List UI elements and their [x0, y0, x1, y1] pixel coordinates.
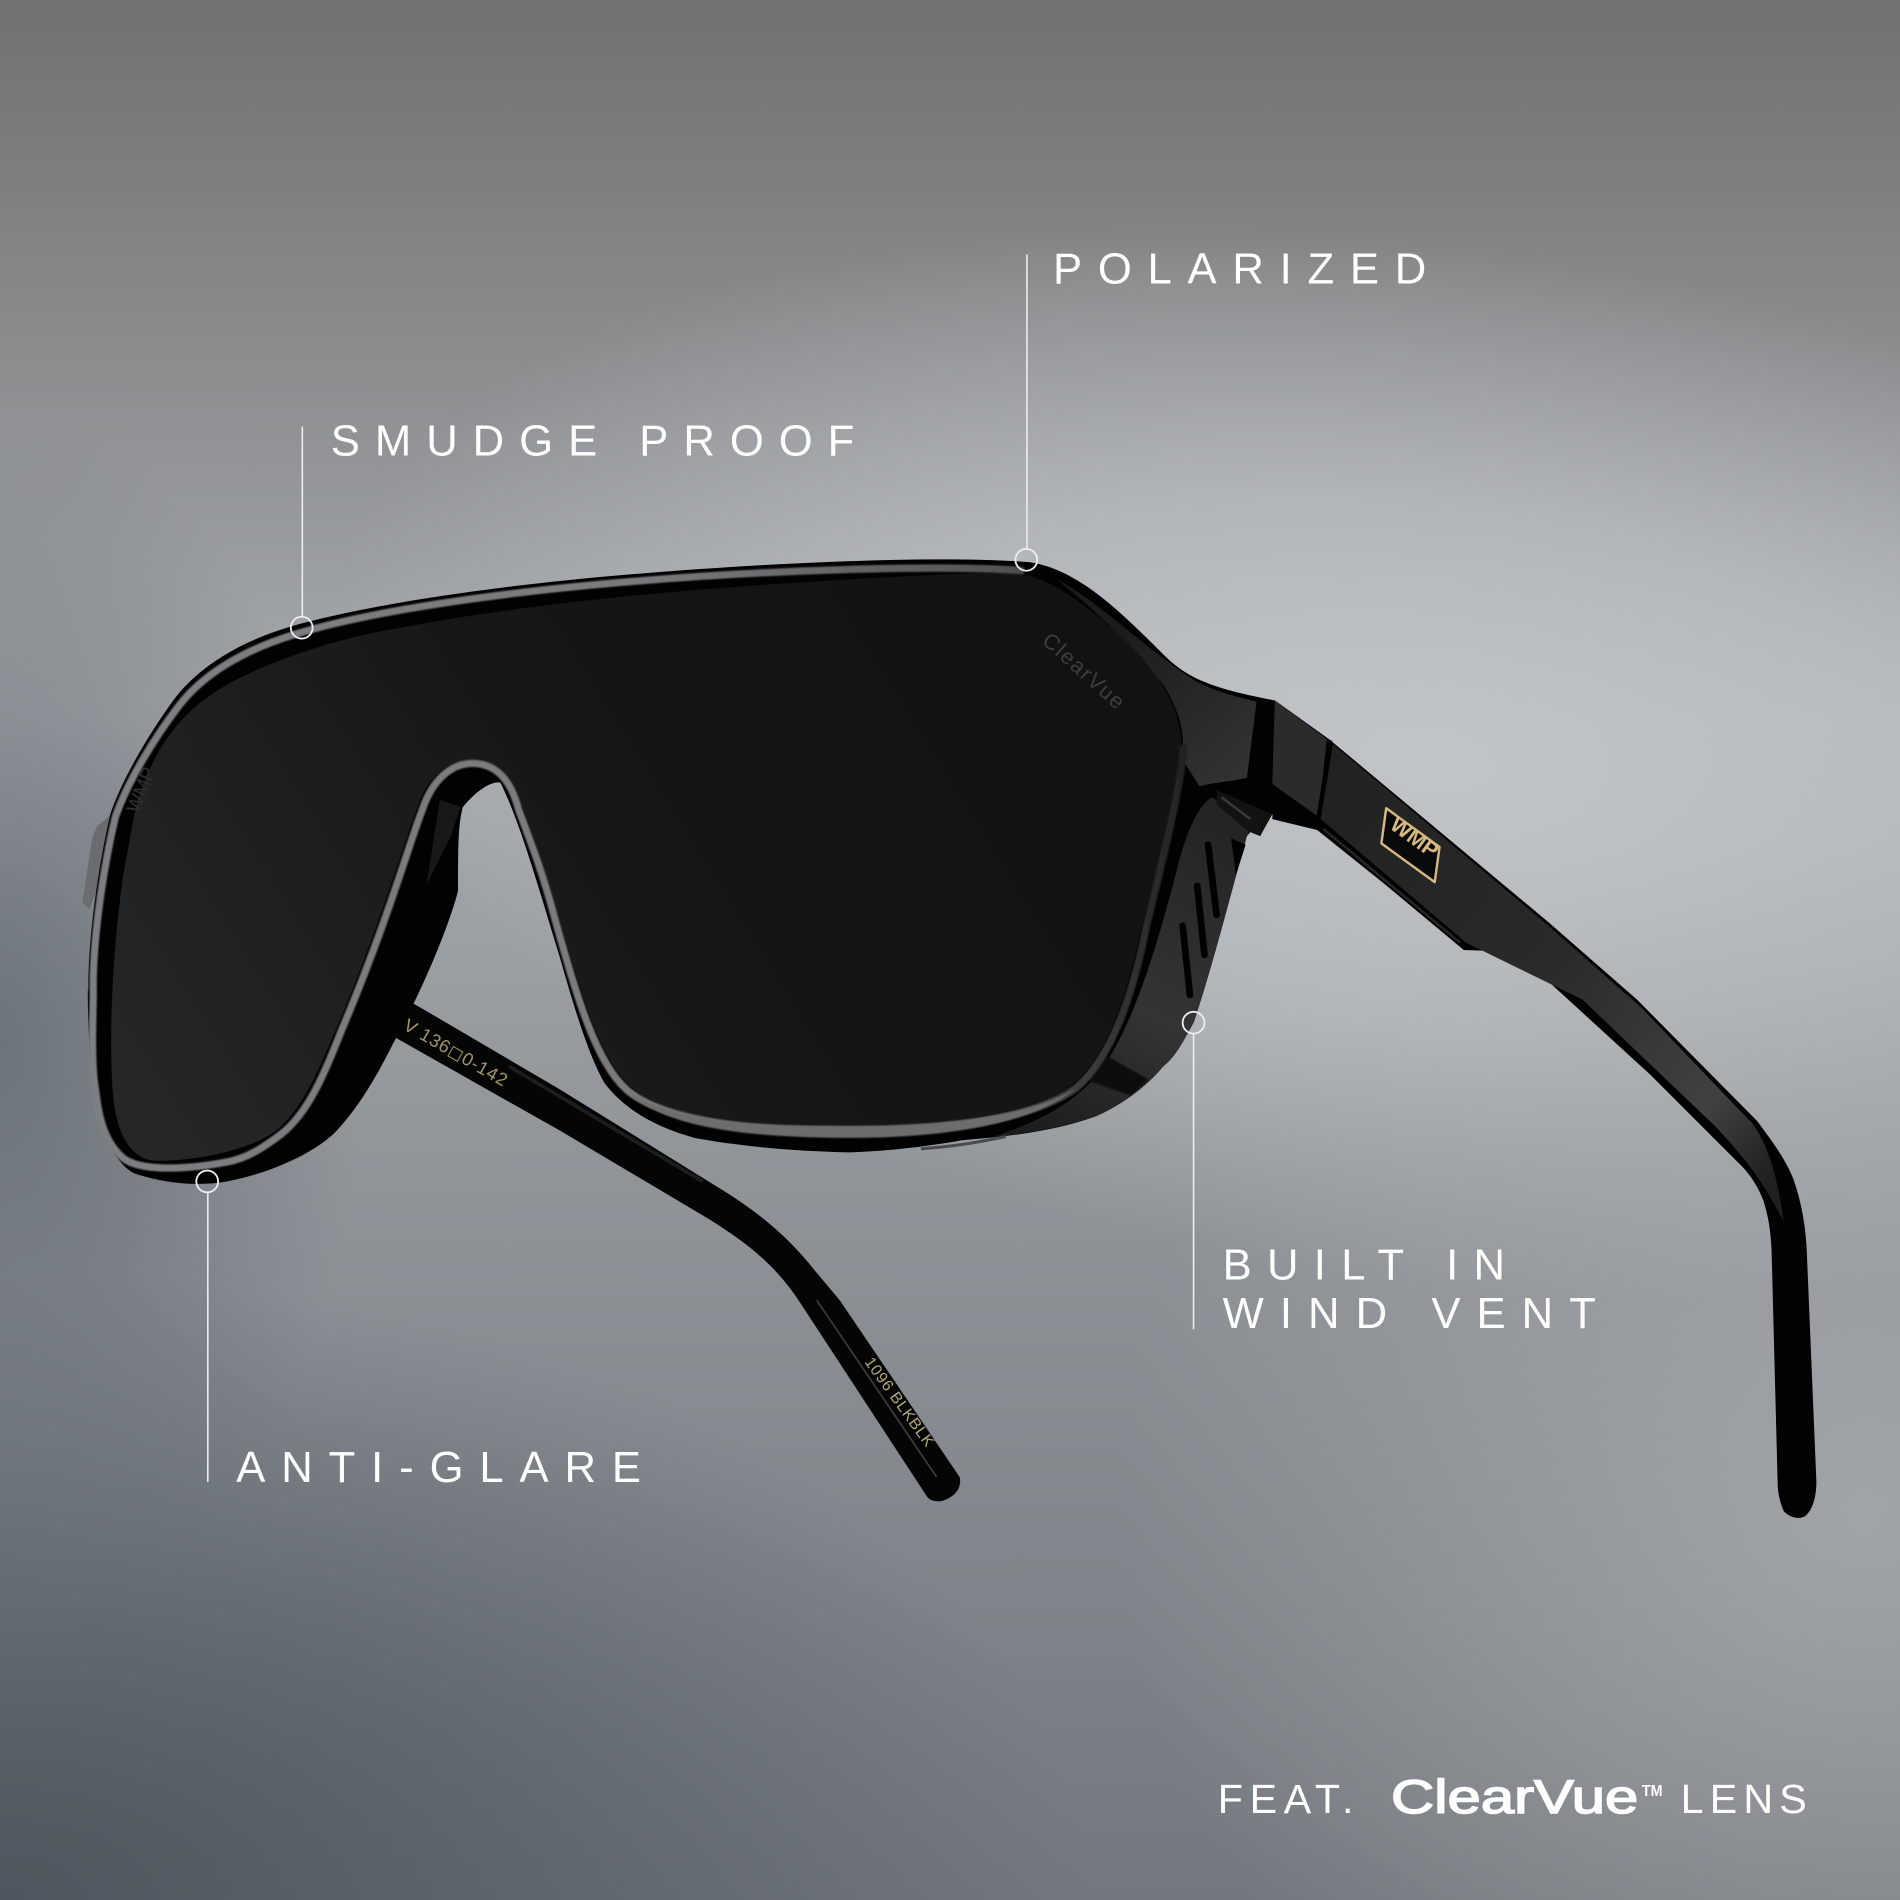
frame bevel rim: [93, 568, 1184, 1168]
nose pad gloss: [427, 800, 460, 885]
callout: built in wind vent: [1183, 1012, 1596, 1338]
callout: anti-glare: [196, 1171, 641, 1492]
callout: smudge proof: [291, 418, 854, 639]
callout: smudge proof: SMUDGE PROOF: [331, 418, 854, 466]
frame gloss near hinge: [1057, 579, 1257, 786]
temple face: [1321, 744, 1784, 1221]
callout: built in wind vent: WIND VENT: [1223, 1290, 1596, 1338]
temple text: size: V 136◻0-142: [400, 1015, 512, 1091]
far temple arm: [393, 1003, 960, 1501]
callout: polarized: [1015, 246, 1426, 571]
callout: anti-glare: ANTI-GLARE: [236, 1444, 641, 1492]
vent slots: [1183, 845, 1217, 995]
callout: polarized: POLARIZED: [1053, 246, 1426, 294]
faint left lens mark: WMP: [122, 764, 161, 816]
hinge block: [1272, 700, 1327, 817]
footer: feat. ClearVue lens: LENS: [1681, 1776, 1807, 1822]
temple text: model: 1096 BLKBLK: [861, 1354, 937, 1451]
frame body: [88, 559, 1330, 1184]
lens: [111, 573, 1181, 1161]
lens logo: ClearVue: ClearVue: [1038, 627, 1130, 714]
footer: feat. ClearVue lens: TM: [1642, 1783, 1663, 1800]
callout: built in wind vent: BUILT IN: [1223, 1242, 1505, 1290]
shield dark reflection: [1082, 1053, 1149, 1095]
hinge underside piece: [1217, 790, 1272, 836]
footer: feat. ClearVue lens: FEAT.: [1218, 1776, 1354, 1822]
bottom rim highlight: [628, 1088, 1076, 1138]
WMP badge: WMP: [1386, 811, 1444, 863]
side shield with wind vent: [921, 790, 1272, 1149]
footer: feat. ClearVue lens: [1218, 1771, 1807, 1824]
footer: feat. ClearVue lens: ClearVue: [1391, 1771, 1638, 1824]
near temple arm: [1272, 700, 1816, 1518]
WMP badge: [1381, 808, 1444, 882]
sunglasses: [82, 559, 1816, 1518]
left hinge stub: [82, 814, 111, 909]
